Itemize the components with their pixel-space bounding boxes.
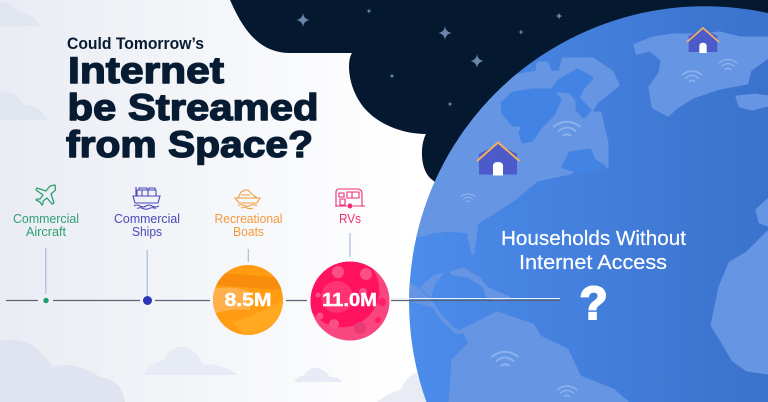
title kicker: Could Tomorrow’s — [67, 34, 204, 53]
icon: house top right — [687, 28, 719, 53]
stars — [296, 8, 562, 107]
planet: orange — [213, 265, 283, 340]
label: Recreational — [214, 211, 282, 226]
item: RVs — [305, 189, 390, 340]
marker dot — [43, 298, 49, 303]
title — [66, 34, 318, 165]
item: commercial ships — [114, 187, 180, 305]
globe — [400, 6, 768, 402]
title headline: be Streamed — [68, 86, 318, 128]
item: commercial aircraft: Aircraft — [26, 224, 66, 239]
icon: house left — [477, 142, 520, 176]
item: households without internet access: Internet Access — [519, 251, 667, 274]
value: question mark: ? — [579, 277, 608, 329]
item: commercial aircraft — [13, 185, 79, 303]
marker dot — [143, 296, 152, 305]
title headline — [66, 49, 318, 165]
title headline: from Space? — [66, 123, 313, 165]
background — [0, 0, 410, 402]
title headline: Internet — [68, 49, 225, 91]
icon: plane — [36, 185, 56, 205]
clouds — [0, 3, 428, 402]
timeline axis — [6, 298, 560, 300]
inland water — [502, 70, 605, 172]
item: households without internet access — [501, 227, 686, 329]
item: commercial ships: Ships — [132, 224, 162, 239]
label: Commercial — [114, 211, 180, 226]
dark space backdrop — [230, 0, 768, 190]
icon: boat — [235, 190, 260, 209]
label: Commercial — [13, 211, 79, 226]
heading: Households Without — [501, 227, 686, 250]
continents — [400, 33, 768, 402]
label: RVs — [339, 211, 361, 226]
value: 8.5M — [224, 290, 272, 310]
value: 11.0M — [322, 290, 377, 310]
icon: ship — [133, 187, 160, 209]
item: recreational boats — [213, 190, 283, 340]
planet: pink — [310, 262, 390, 340]
item: recreational boats: Boats — [233, 224, 264, 239]
wifi icons — [461, 60, 737, 396]
connector lines — [46, 233, 350, 296]
icon: RV — [336, 189, 365, 207]
